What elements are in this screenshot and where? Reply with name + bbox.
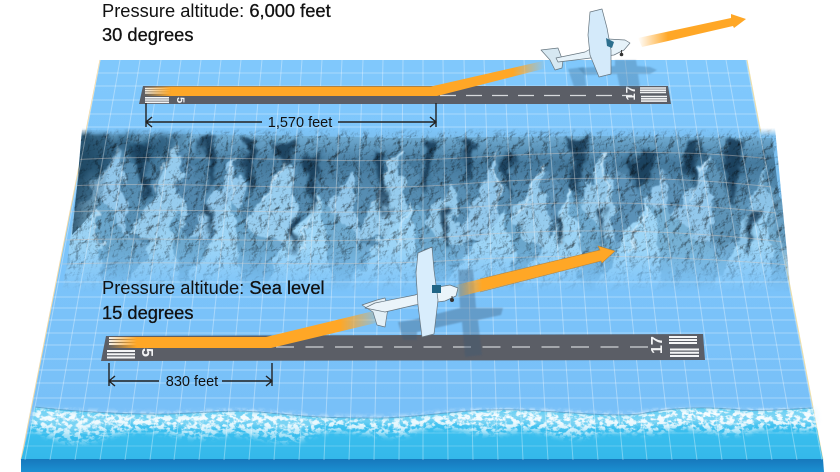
flight path arrow: 30 degrees [143, 14, 746, 96]
heading: lower scenario: Pressure altitude: Sea level [102, 277, 325, 298]
runway: lower [101, 334, 705, 361]
dimension: 1,570 feet [146, 103, 436, 131]
heading: upper scenario: Pressure altitude: 6,000 feet [102, 0, 331, 21]
runway: upper: 5 [174, 97, 186, 103]
shadow: upper plane [568, 60, 657, 88]
runway: upper [139, 86, 671, 104]
dimension: 830 feet: 830 feet [166, 374, 218, 390]
top shadow band [78, 133, 190, 185]
foam haze [30, 408, 818, 432]
heading: upper scenario [102, 0, 331, 45]
dark valleys [134, 138, 756, 255]
front edge of the block [21, 459, 824, 472]
dimension: 830 feet [109, 363, 272, 390]
runway: lower: 5 [138, 348, 155, 357]
dimension: 1,570 feet: 1,570 feet [268, 115, 332, 131]
relief shading [64, 128, 790, 288]
water band [21, 407, 823, 460]
runway: upper: 17 [623, 86, 638, 100]
heading: lower scenario: 15 degrees [102, 302, 193, 323]
heading: lower scenario [102, 277, 325, 323]
heading: upper scenario: 30 degrees [102, 24, 193, 45]
flight path arrow: 15 degrees [107, 246, 615, 348]
runway: lower: 17 [649, 336, 666, 354]
airplane: lower [362, 247, 458, 337]
foam [30, 408, 818, 445]
shadow: lower plane [398, 269, 503, 357]
front ridge row [64, 212, 104, 284]
back ridge row [71, 147, 130, 238]
ridge highlights [93, 142, 707, 255]
shoreline shadow [35, 407, 813, 418]
airplane: upper [541, 9, 630, 77]
mountain terrain [64, 128, 790, 289]
